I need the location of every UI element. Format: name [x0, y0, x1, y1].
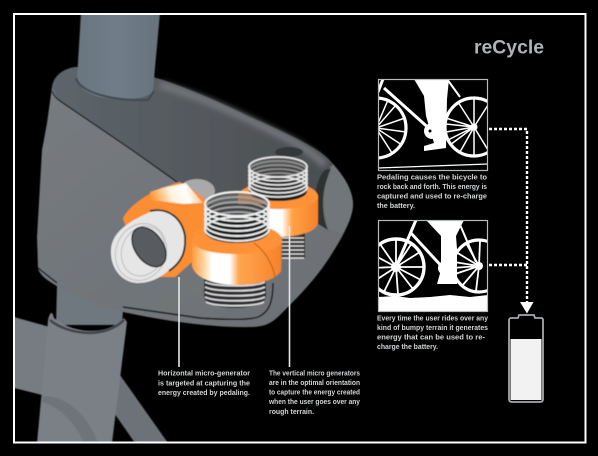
top edge highlight — [160, 85, 325, 165]
leg silhouette — [414, 79, 449, 151]
caption: vertical micro generators: to capture the energy created — [269, 388, 360, 396]
caption: pedaling: captured and used to re-charge — [377, 192, 487, 200]
rear top coil — [249, 157, 307, 201]
orange cylinder — [123, 182, 210, 277]
bumpy ground — [378, 295, 488, 312]
caption: bumpy terrain — [377, 314, 489, 351]
seam lines — [52, 91, 177, 182]
caption: bumpy terrain: charge the battery. — [377, 342, 438, 351]
caption: vertical micro generators: The vertical micro generators — [269, 368, 360, 378]
caption: pedaling: rock back and forth. This energy is — [377, 182, 487, 191]
threaded tube — [111, 211, 185, 283]
battery icon — [509, 315, 543, 402]
front lower coil — [204, 278, 266, 308]
bike frame — [379, 80, 428, 127]
rear vertical micro generator — [238, 157, 318, 258]
seat post — [76, 13, 160, 100]
bike image: pedaling — [378, 78, 488, 172]
leg silhouette — [426, 220, 464, 284]
caption: pedaling: Pedaling causes the bicycle to — [377, 172, 487, 182]
caption: bumpy terrain: kind of bumpy terrain it generates — [377, 323, 488, 332]
back end cap — [183, 178, 216, 200]
tube opening — [130, 226, 168, 268]
caption: pedaling: the battery. — [377, 201, 415, 210]
leader line: horizontal generator — [178, 277, 180, 367]
recess behind rear coil — [275, 147, 303, 157]
housing top surface — [52, 67, 333, 204]
caption: bumpy terrain: energy that can be used to re- — [377, 332, 485, 342]
caption: horizontal micro generator: is targeted at capturing the — [158, 378, 250, 388]
side slot and tip — [316, 168, 331, 230]
front top coil — [205, 192, 269, 243]
horizontal micro generator — [107, 179, 215, 288]
caption: bumpy terrain: Every time the user rides over any — [377, 314, 489, 322]
wheels — [379, 221, 487, 296]
bike image: bumpy terrain — [378, 220, 488, 312]
caption: pedaling — [377, 172, 487, 210]
product illustration: micro generator housing — [14, 13, 353, 443]
caption: horizontal micro generator: energy created by pedaling. — [158, 388, 250, 397]
dotted arrow to battery — [489, 129, 534, 314]
rear lower coil — [281, 232, 305, 258]
bike frame — [396, 221, 440, 266]
post collar — [76, 78, 154, 100]
thread rings — [114, 222, 168, 282]
housing body — [37, 67, 353, 327]
title: reCycle — [474, 36, 544, 58]
front vertical micro generator — [192, 192, 282, 308]
caption: vertical micro generators: rough terrain. — [269, 407, 314, 416]
lower bicycle frame tubes — [14, 285, 168, 443]
caption: horizontal micro generator: Horizontal micro-generator — [158, 368, 250, 378]
caption: vertical micro generators — [268, 368, 361, 416]
rear orange band — [238, 182, 318, 237]
caption: vertical micro generators: when the user goes over any — [268, 397, 361, 406]
caption: horizontal micro generator — [158, 368, 250, 397]
front orange band — [192, 223, 282, 285]
leader line: vertical generators — [288, 226, 290, 367]
wheels — [379, 80, 487, 169]
caption: vertical micro generators: are in the optimal orientation — [269, 378, 360, 387]
arrowhead — [520, 302, 534, 314]
